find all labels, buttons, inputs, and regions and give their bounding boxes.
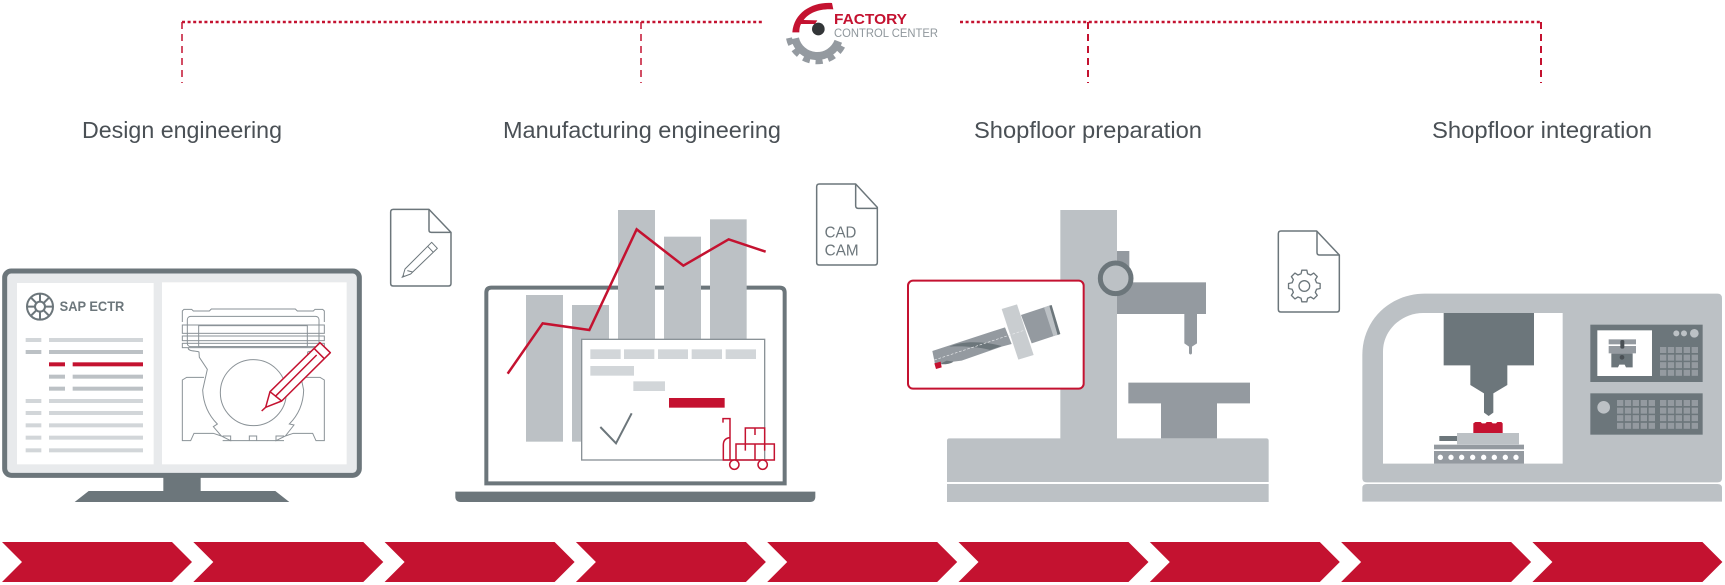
machine base [1362, 484, 1722, 502]
logo: Factory Control Center: FACTORY [834, 11, 907, 28]
machine arm and table [1117, 251, 1250, 438]
icon: document with pencil [391, 209, 451, 286]
logo: Factory Control Center: CONTROL CENTER [834, 28, 938, 40]
illustration: monitor with SAP ECTR [5, 271, 359, 502]
heading: Shopfloor preparation: Shopfloor preparation [974, 117, 1202, 143]
callout: drill tool [908, 281, 1084, 389]
control panel: screen [1590, 325, 1703, 382]
left panel: document list [17, 283, 154, 464]
spindle [1444, 313, 1534, 416]
icon: document with gear [1278, 231, 1339, 312]
left panel: document list: SAP ECTR [60, 298, 124, 314]
connector: dotted bracket left [182, 22, 764, 83]
illustration: CNC machine [1362, 294, 1722, 502]
icon: document CAD CAM: CAM [825, 242, 859, 259]
right panel: piston drawing with red pencil [162, 282, 347, 464]
monitor frame [5, 271, 359, 475]
laptop [455, 288, 815, 502]
monitor stand [75, 477, 289, 502]
workpiece and table [1434, 422, 1524, 464]
logo: Factory Control Center [789, 3, 938, 61]
connector: dotted bracket right [960, 22, 1541, 83]
line chart [508, 229, 766, 374]
heading: Design engineering: Design engineering [82, 117, 282, 143]
work window [1383, 313, 1563, 464]
icon: trolley with boxes [723, 419, 774, 469]
control panel: keypad [1590, 393, 1703, 435]
machine base and column [947, 210, 1269, 502]
illustration: drilling machine [908, 210, 1269, 502]
bar chart [526, 210, 747, 442]
process arrow band: nine red chevrons [2, 542, 1722, 582]
machine body [1362, 294, 1722, 482]
heading: Manufacturing engineering: Manufacturing engineering [503, 117, 781, 143]
illustration: laptop with chart and planning board [455, 210, 815, 502]
ring joint [1100, 263, 1131, 294]
icon: document CAD CAM: CAD [825, 224, 856, 241]
heading: Shopfloor integration: Shopfloor integration [1432, 117, 1652, 143]
planning board [582, 339, 765, 460]
icon: document CAD CAM [817, 184, 877, 265]
